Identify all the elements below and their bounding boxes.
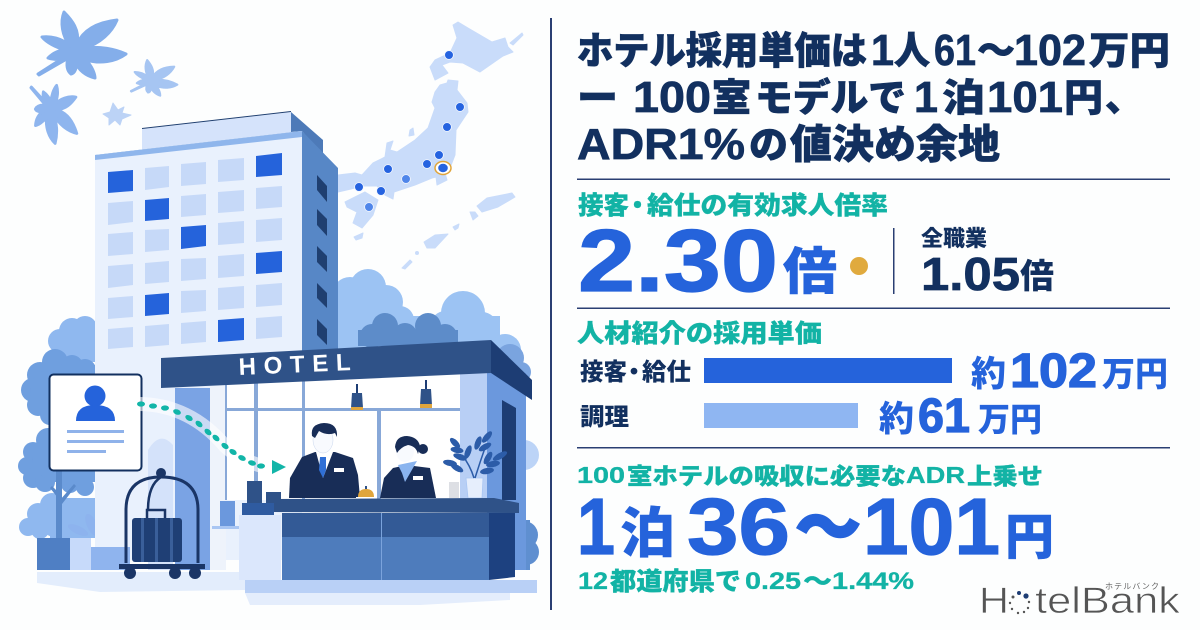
windows: [108, 153, 282, 349]
all occupations comparison: 1.05: [921, 248, 1020, 300]
plant in vase: [443, 430, 508, 498]
heading: 100: [577, 462, 625, 488]
bar: cooking: 万円: [978, 401, 1042, 438]
big figure: [577, 482, 1054, 571]
big figure: 101: [863, 482, 1000, 571]
big number: [578, 211, 837, 310]
staff member: man: [289, 423, 360, 498]
title: 101: [987, 73, 1063, 122]
title: 〜: [977, 31, 1015, 73]
title: 人: [894, 31, 930, 73]
bar: cooking: 調理: [580, 404, 629, 431]
bar: service: 給仕: [642, 359, 691, 386]
heading: 給仕の有効求人倍率: [647, 191, 888, 220]
bar: service: 102: [1010, 345, 1097, 398]
bar: service: [580, 345, 1168, 398]
bar: service: ・: [622, 359, 646, 386]
planter: [37, 538, 130, 570]
pendant lamps: [351, 380, 432, 410]
sub note: [578, 568, 914, 596]
heading: ADR: [906, 462, 965, 488]
panel: job openings ratio: [578, 191, 1054, 310]
title: 万円: [1089, 31, 1170, 73]
bar: cooking: [580, 390, 1042, 443]
title: 室: [712, 78, 751, 120]
big figure: 〜: [795, 491, 861, 567]
illustration: hotel scene: [18, 12, 539, 605]
heading: 人材紹介の採用単価: [577, 320, 822, 348]
big number: 2.30: [578, 211, 778, 310]
title: 泊: [942, 78, 985, 120]
big number: 倍: [783, 244, 837, 300]
heading: 上乗せ: [967, 463, 1043, 489]
title: 61: [934, 26, 976, 75]
title: ホテル採用単価は: [577, 31, 867, 73]
candidate card: [50, 374, 142, 470]
big figure: 36: [687, 482, 790, 571]
hotel entrance: [161, 340, 532, 570]
title: 100: [633, 73, 711, 122]
title: 値決め余地: [790, 123, 1000, 167]
vertical divider: [550, 18, 552, 610]
big figure: 円: [1005, 511, 1054, 565]
logo: HotelBank: telBank: [1035, 580, 1181, 621]
arrow: dotted path from card to staff: [137, 401, 286, 474]
big figure: 1: [577, 482, 615, 571]
background trees: [18, 269, 539, 570]
title: 、: [1105, 78, 1143, 120]
title: 1: [871, 26, 894, 75]
heading: [577, 462, 1043, 489]
sub note: 1.44%: [832, 568, 914, 595]
pale foliage plant: [66, 505, 127, 538]
title: [577, 26, 1170, 169]
reception desk: [212, 481, 519, 580]
ground: [37, 572, 537, 605]
title: 円: [1064, 78, 1103, 120]
bar: cooking: 約: [879, 400, 914, 439]
title: モデルで: [755, 77, 906, 120]
sub note: 12: [578, 568, 608, 595]
heading: 室ホテルの吸収に必要な: [627, 463, 906, 489]
all occupations comparison: 全職業: [921, 226, 987, 251]
sub note: 0.25: [745, 568, 801, 595]
map of Japan with dots: [338, 22, 523, 269]
bar: service: 万円: [1102, 356, 1168, 394]
gold marker: [850, 257, 868, 275]
title: の: [749, 125, 788, 167]
big figure: 泊: [620, 504, 675, 564]
logo: HotelBank: H: [979, 580, 1009, 621]
title: 1: [914, 73, 938, 122]
all occupations comparison: [921, 226, 1054, 300]
bar: service: 接客: [580, 359, 627, 386]
panel: ADR uplift: [577, 462, 1054, 596]
logo: HotelBank: [979, 580, 1181, 621]
logo: HotelBank: ホテルバンク: [1105, 582, 1159, 591]
title: ADR1%: [577, 120, 745, 169]
title: 102: [1014, 26, 1086, 75]
luggage cart: [119, 468, 205, 579]
sub note: 〜: [803, 568, 832, 596]
panel: hiring cost bars: [577, 320, 1168, 443]
left trees: [19, 316, 97, 539]
sub note: 都道府県で: [610, 568, 741, 596]
bar: service: 約: [971, 355, 1006, 394]
staff member: woman: [380, 436, 436, 498]
icon: maple leaves: [29, 12, 179, 146]
heading: ・: [625, 192, 650, 220]
sign text: HOTEL: [238, 349, 351, 381]
heading: 接客: [578, 192, 629, 220]
bar: cooking: 61: [918, 390, 970, 443]
all occupations comparison: 倍: [1020, 258, 1054, 296]
title: ー: [577, 78, 618, 120]
bell: [356, 486, 375, 499]
hotel building: [95, 111, 338, 570]
